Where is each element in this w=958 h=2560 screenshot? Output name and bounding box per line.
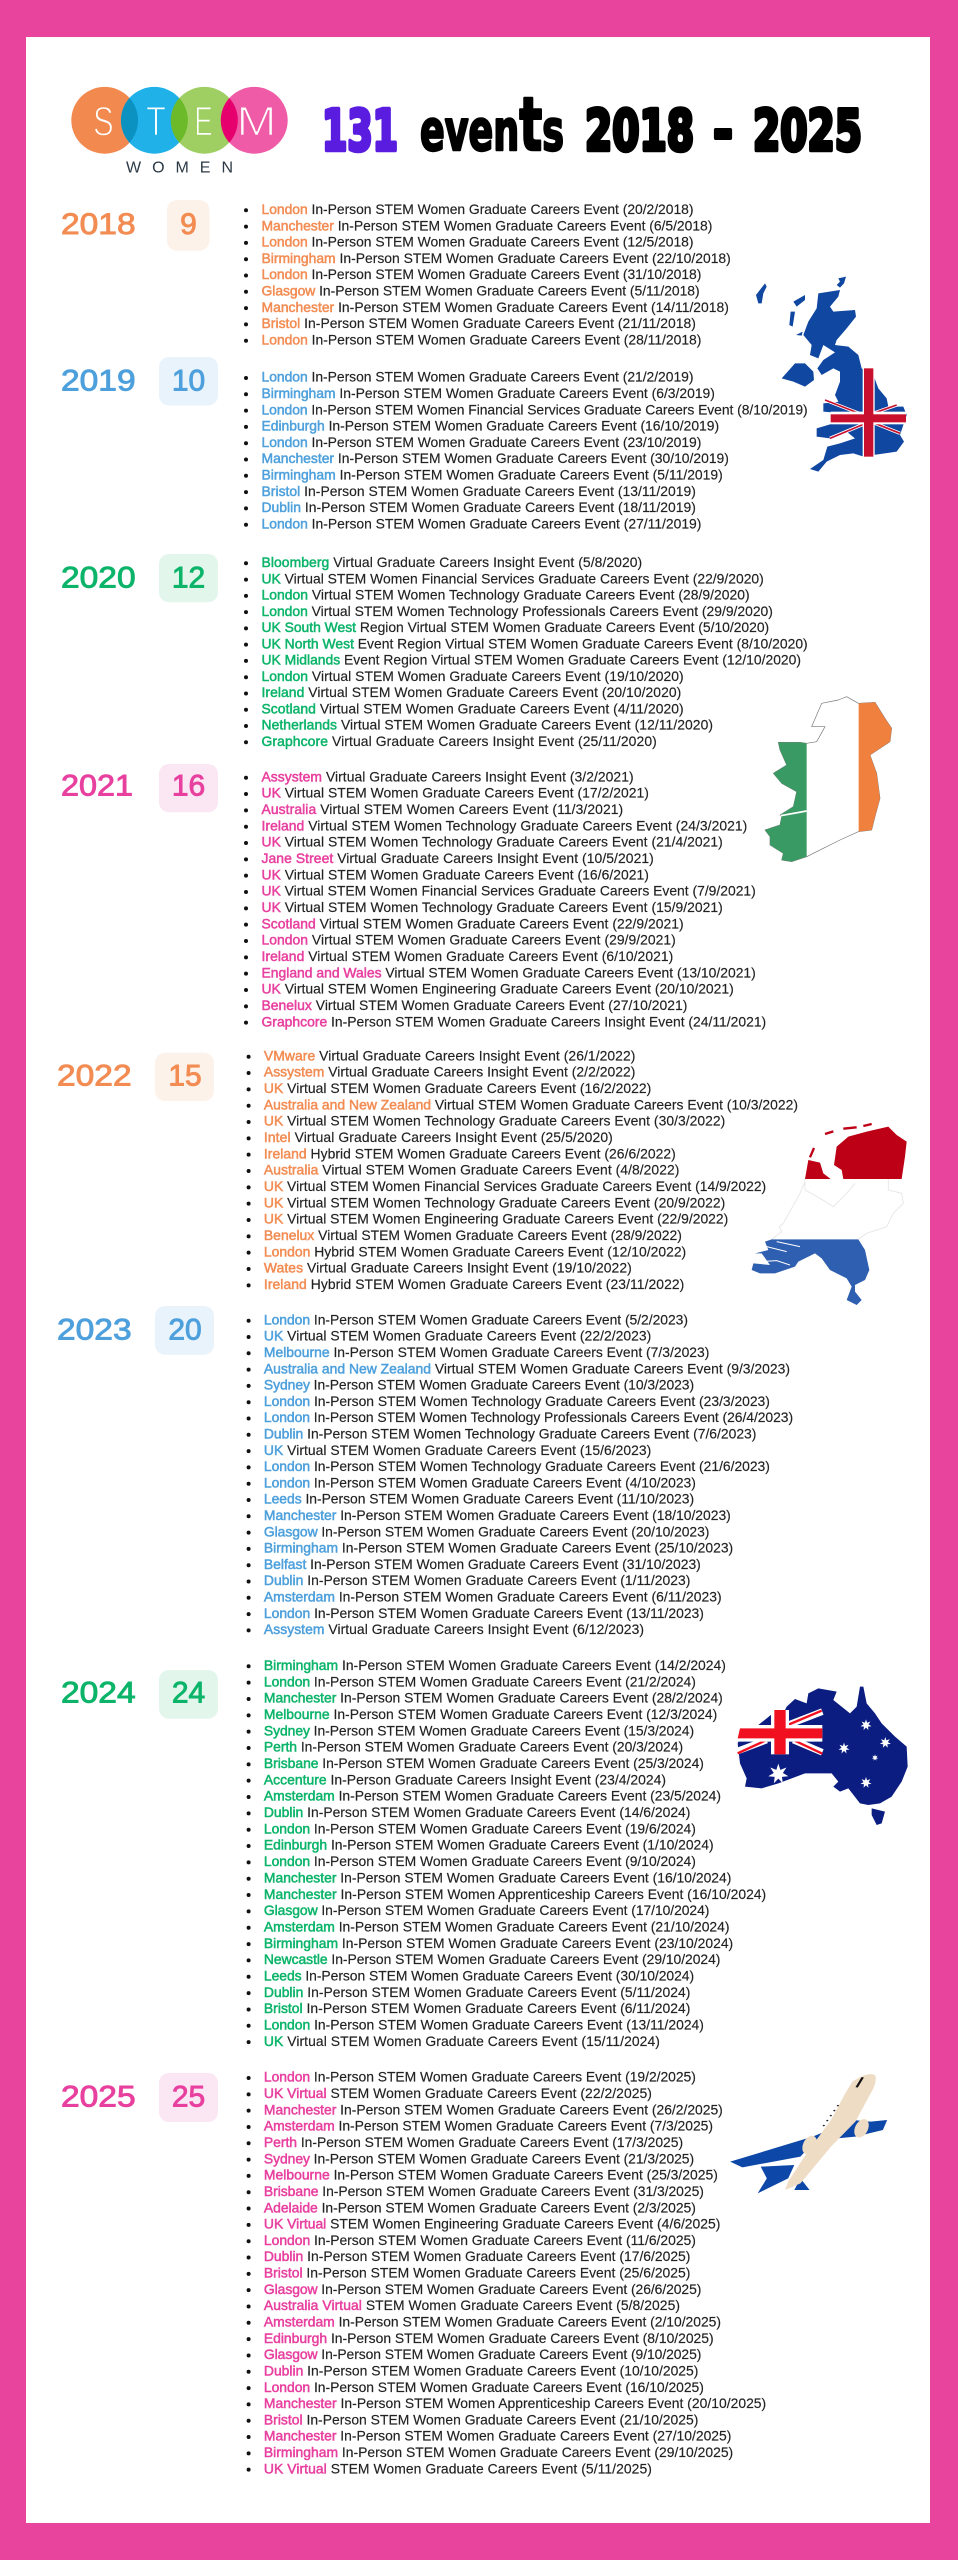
event list 2018: Manchester In-Person STEM Women Graduate Careers Event (6/5/2018) xyxy=(262,217,712,233)
map: Netherlands with flag xyxy=(752,1124,907,1305)
event list 2018: Manchester In-Person STEM Women Graduate Careers Event (14/11/2018) xyxy=(262,299,729,315)
event list 2020: UK North West Event Region Virtual STEM Women Graduate Careers Event (8/10/2020) xyxy=(262,635,808,651)
event list 2023: London In-Person STEM Women Technology Graduate Careers Event (21/6/2023) xyxy=(264,1458,770,1474)
event list 2024: Brisbane In-Person STEM Women Graduate Careers Event (25/3/2024) xyxy=(264,1755,704,1771)
event list 2022: Intel Virtual Graduate Careers Insight Event (25/5/2020) xyxy=(264,1129,613,1145)
event list 2024: London In-Person STEM Women Graduate Careers Event (9/10/2024) xyxy=(264,1853,696,1869)
event list 2022: Wates Virtual Graduate Careers Insight Event (19/10/2022) xyxy=(264,1260,632,1276)
event list 2024: Birmingham In-Person STEM Women Graduate Careers Event (23/10/2024) xyxy=(264,1935,733,1951)
event list 2023: London In-Person STEM Women Graduate Careers Event (4/10/2023) xyxy=(264,1474,696,1490)
event list 2025: London In-Person STEM Women Graduate Careers Event (11/6/2025) xyxy=(264,2232,696,2248)
event list 2020: London Virtual STEM Women Technology Professionals Careers Event (29/9/2020) xyxy=(262,603,773,619)
event list 2023: Leeds In-Person STEM Women Graduate Careers Event (11/10/2023) xyxy=(264,1491,694,1507)
event list 2024: UK Virtual STEM Women Graduate Careers Event (15/11/2024) xyxy=(264,2033,660,2049)
event list 2019: London In-Person STEM Women Graduate Careers Event (21/2/2019) xyxy=(262,369,694,385)
event list 2018: Glasgow In-Person STEM Women Graduate Careers Event (5/11/2018) xyxy=(262,282,700,298)
map: United Kingdom with flag xyxy=(756,277,907,472)
year label 2023: 2023 xyxy=(57,1314,132,1347)
event list 2019: London In-Person STEM Women Graduate Careers Event (23/10/2019) xyxy=(262,434,701,450)
event list 2021: Ireland Virtual STEM Women Technology Graduate Careers Event (24/3/2021) xyxy=(262,817,747,833)
event list 2024: London In-Person STEM Women Graduate Careers Event (13/11/2024) xyxy=(264,2016,704,2032)
year label 2025: 2025 xyxy=(61,2081,136,2114)
event list 2025: Glasgow In-Person STEM Women Graduate Careers Event (9/10/2025) xyxy=(264,2346,701,2362)
event list 2020: Ireland Virtual STEM Women Graduate Careers Event (20/10/2020) xyxy=(262,684,681,700)
event list 2025: Amsterdam In-Person STEM Women Graduate Careers Event (7/3/2025) xyxy=(264,2118,713,2134)
section: 2022 xyxy=(57,1047,798,1292)
event list 2025: Dublin In-Person STEM Women Graduate Careers Event (10/10/2025) xyxy=(264,2362,698,2378)
event list 2020: UK Virtual STEM Women Financial Services Graduate Careers Event (22/9/2020) xyxy=(262,570,764,586)
event list 2023 xyxy=(249,1311,793,1637)
event list 2025: Sydney In-Person STEM Women Graduate Careers Event (21/3/2025) xyxy=(264,2150,694,2166)
event list 2025 xyxy=(249,2069,766,2476)
logo: STEM Women: M xyxy=(236,98,277,145)
logo: STEM Women xyxy=(71,87,288,177)
event list 2024: Leeds In-Person STEM Women Graduate Careers Event (30/10/2024) xyxy=(264,1968,694,1984)
event list 2023: Manchester In-Person STEM Women Graduate Careers Event (18/10/2023) xyxy=(264,1507,731,1523)
event list 2023: Amsterdam In-Person STEM Women Graduate Careers Event (6/11/2023) xyxy=(264,1588,722,1604)
event list 2020: Scotland Virtual STEM Women Graduate Careers Event (4/11/2020) xyxy=(262,700,684,716)
event list 2022: Benelux Virtual STEM Women Graduate Careers Event (28/9/2022) xyxy=(264,1227,682,1243)
event list 2024: Manchester In-Person STEM Women Graduate Careers Event (16/10/2024) xyxy=(264,1869,731,1885)
event list 2024: Melbourne In-Person STEM Women Graduate Careers Event (12/3/2024) xyxy=(264,1706,717,1722)
badge: 24 events: 24 xyxy=(172,1677,205,1710)
year label 2024: 2024 xyxy=(61,1677,136,1710)
event list 2022: UK Virtual STEM Women Technology Graduate Careers Event (20/9/2022) xyxy=(264,1194,725,1210)
event list 2025: Adelaide In-Person STEM Women Graduate Careers Event (2/3/2025) xyxy=(264,2199,696,2215)
section: 2023 xyxy=(57,1306,793,1637)
event list 2025: UK Virtual STEM Women Graduate Careers Event (22/2/2025) xyxy=(264,2085,652,2101)
event list 2018: London In-Person STEM Women Graduate Careers Event (28/11/2018) xyxy=(262,331,701,347)
event list 2023: Melbourne In-Person STEM Women Graduate Careers Event (7/3/2023) xyxy=(264,1344,709,1360)
badge: 9 events xyxy=(167,200,210,251)
event list 2021: UK Virtual STEM Women Technology Graduate Careers Event (21/4/2021) xyxy=(262,834,723,850)
event list 2023: Belfast In-Person STEM Women Graduate Careers Event (31/10/2023) xyxy=(264,1556,701,1572)
logo: STEM Women: T xyxy=(146,98,166,145)
event list 2019: London In-Person STEM Women Graduate Careers Event (27/11/2019) xyxy=(262,515,701,531)
badge: 12 events: 12 xyxy=(172,561,205,594)
event list 2021: UK Virtual STEM Women Graduate Careers Event (17/2/2021) xyxy=(262,785,649,801)
year label 2019: 2019 xyxy=(61,365,136,398)
section: 2018 xyxy=(61,200,731,347)
event list 2021: England and Wales Virtual STEM Women Graduate Careers Event (13/10/2021) xyxy=(262,964,756,980)
event list 2025: Bristol In-Person STEM Women Graduate Careers Event (25/6/2025) xyxy=(264,2264,690,2280)
event list 2019: Birmingham In-Person STEM Women Graduate Careers Event (6/3/2019) xyxy=(262,385,715,401)
badge: 24 events xyxy=(159,1670,218,1719)
badge: 16 events xyxy=(159,764,218,812)
badge: 15 events: 15 xyxy=(168,1060,202,1093)
event list 2025: Amsterdam In-Person STEM Women Graduate Careers Event (2/10/2025) xyxy=(264,2314,721,2330)
event list 2019: Manchester In-Person STEM Women Graduate Careers Event (30/10/2019) xyxy=(262,450,729,466)
event list 2024: Newcastle In-Person STEM Women Graduate Careers Event (29/10/2024) xyxy=(264,1951,720,1967)
event list 2021: Benelux Virtual STEM Women Graduate Careers Event (27/10/2021) xyxy=(262,997,687,1013)
event list 2024: Manchester In-Person STEM Women Apprenticeship Careers Event (16/10/2024) xyxy=(264,1886,766,1902)
event list 2024: Dublin In-Person STEM Women Graduate Careers Event (14/6/2024) xyxy=(264,1804,690,1820)
event list 2022: UK Virtual STEM Women Graduate Careers Event (16/2/2022) xyxy=(264,1080,651,1096)
section: 2024 xyxy=(61,1657,766,2049)
logo: STEM Women: E xyxy=(194,98,213,145)
event list 2024: Amsterdam In-Person STEM Women Graduate Careers Event (21/10/2024) xyxy=(264,1918,730,1934)
title: - xyxy=(713,99,733,164)
event list 2023: London In-Person STEM Women Technology Professionals Careers Event (26/4/2023) xyxy=(264,1409,793,1425)
event list 2018: Birmingham In-Person STEM Women Graduate Careers Event (22/10/2018) xyxy=(262,250,731,266)
event list 2021: UK Virtual STEM Women Technology Graduate Careers Event (15/9/2021) xyxy=(262,899,723,915)
event list 2025: London In-Person STEM Women Graduate Careers Event (16/10/2025) xyxy=(264,2379,704,2395)
event list 2023: Glasgow In-Person STEM Women Graduate Careers Event (20/10/2023) xyxy=(264,1523,709,1539)
event list 2025: Edinburgh In-Person STEM Women Graduate Careers Event (8/10/2025) xyxy=(264,2330,714,2346)
event list 2023: UK Virtual STEM Women Graduate Careers Event (22/2/2023) xyxy=(264,1328,651,1344)
badge: 10 events: 10 xyxy=(172,365,205,398)
year label 2018: 2018 xyxy=(61,208,136,241)
event list 2021: UK Virtual STEM Women Engineering Graduate Careers Event (20/10/2021) xyxy=(262,981,734,997)
event list 2019 xyxy=(246,369,808,531)
event list 2025: Bristol In-Person STEM Women Graduate Careers Event (21/10/2025) xyxy=(264,2411,698,2427)
event list 2022: London Hybrid STEM Women Graduate Careers Event (12/10/2022) xyxy=(264,1243,686,1259)
title: 2025 xyxy=(753,99,862,164)
event list 2021: London Virtual STEM Women Graduate Careers Event (29/9/2021) xyxy=(262,932,676,948)
event list 2024: Edinburgh In-Person STEM Women Graduate Careers Event (1/10/2024) xyxy=(264,1837,714,1853)
event list 2024: Sydney In-Person STEM Women Graduate Careers Event (15/3/2024) xyxy=(264,1722,694,1738)
event list 2023: Assystem Virtual Graduate Careers Insight Event (6/12/2023) xyxy=(264,1621,644,1637)
logo: STEM Women: S xyxy=(93,98,114,145)
event list 2018 xyxy=(246,201,731,347)
event list 2025: UK Virtual STEM Women Graduate Careers Event (5/11/2025) xyxy=(264,2460,652,2476)
event list 2025: Perth In-Person STEM Women Graduate Careers Event (17/3/2025) xyxy=(264,2134,683,2150)
event list 2025: Birmingham In-Person STEM Women Graduate Careers Event (29/10/2025) xyxy=(264,2444,733,2460)
event list 2019: Bristol In-Person STEM Women Graduate Careers Event (13/11/2019) xyxy=(262,483,696,499)
event list 2021: Assystem Virtual Graduate Careers Insight Event (3/2/2021) xyxy=(262,768,634,784)
event list 2023: Sydney In-Person STEM Women Graduate Careers Event (10/3/2023) xyxy=(264,1377,694,1393)
event list 2025: Manchester In-Person STEM Women Graduate Careers Event (27/10/2025) xyxy=(264,2428,731,2444)
event list 2021: Scotland Virtual STEM Women Graduate Careers Event (22/9/2021) xyxy=(262,915,684,931)
badge: 25 events xyxy=(159,2073,218,2122)
event list 2019: London In-Person STEM Women Financial Services Graduate Careers Event (8/10/2019) xyxy=(262,401,808,417)
event list 2020: Bloomberg Virtual Graduate Careers Insight Event (5/8/2020) xyxy=(262,554,642,570)
event list 2022: UK Virtual STEM Women Financial Services Graduate Careers Event (14/9/2022) xyxy=(264,1178,766,1194)
title: events xyxy=(420,82,564,168)
badge: 10 events xyxy=(159,357,218,406)
event list 2023: London In-Person STEM Women Graduate Careers Event (5/2/2023) xyxy=(264,1311,688,1327)
event list 2019: Dublin In-Person STEM Women Graduate Careers Event (18/11/2019) xyxy=(262,499,696,515)
event list 2023: Birmingham In-Person STEM Women Graduate Careers Event (25/10/2023) xyxy=(264,1540,733,1556)
event list 2024: Birmingham In-Person STEM Women Graduate Careers Event (14/2/2024) xyxy=(264,1657,726,1673)
event list 2025: Australia Virtual STEM Women Graduate Careers Event (5/8/2025) xyxy=(264,2297,680,2313)
event list 2023: London In-Person STEM Women Technology Graduate Careers Event (23/3/2023) xyxy=(264,1393,770,1409)
event list 2021: Australia Virtual STEM Women Careers Event (11/3/2021) xyxy=(262,801,623,817)
event list 2022: Australia and New Zealand Virtual STEM Women Graduate Careers Event (10/3/2022) xyxy=(264,1096,798,1112)
event list 2024: Dublin In-Person STEM Women Graduate Careers Event (5/11/2024) xyxy=(264,1984,690,2000)
event list 2024: Bristol In-Person STEM Women Graduate Careers Event (6/11/2024) xyxy=(264,2000,690,2016)
event list 2023: Australia and New Zealand Virtual STEM Women Graduate Careers Event (9/3/2023) xyxy=(264,1360,790,1376)
icon: aeroplane xyxy=(730,2074,887,2193)
event list 2020: Netherlands Virtual STEM Women Graduate Careers Event (12/11/2020) xyxy=(262,717,713,733)
event list 2025: Melbourne In-Person STEM Women Graduate Careers Event (25/3/2025) xyxy=(264,2167,718,2183)
event list 2022: Australia Virtual STEM Women Graduate Careers Event (4/8/2022) xyxy=(264,1162,679,1178)
event list 2018: London In-Person STEM Women Graduate Careers Event (20/2/2018) xyxy=(262,201,694,217)
logo: STEM Women: WOMEN xyxy=(126,160,233,177)
year label 2022: 2022 xyxy=(57,1060,132,1093)
event list 2023: Dublin In-Person STEM Women Graduate Careers Event (1/11/2023) xyxy=(264,1572,690,1588)
badge: 20 events xyxy=(155,1306,214,1355)
event list 2022: UK Virtual STEM Women Technology Graduate Careers Event (30/3/2022) xyxy=(264,1113,725,1129)
title xyxy=(322,82,862,168)
event list 2024: Manchester In-Person STEM Women Graduate Careers Event (28/2/2024) xyxy=(264,1690,723,1706)
event list 2020 xyxy=(246,554,808,749)
event list 2025: Dublin In-Person STEM Women Graduate Careers Event (17/6/2025) xyxy=(264,2248,690,2264)
badge: 16 events: 16 xyxy=(172,770,205,803)
section: 2025 xyxy=(61,2069,766,2476)
section: 2020 xyxy=(61,554,808,749)
section: 2019 xyxy=(61,357,808,531)
event list 2024: London In-Person STEM Women Graduate Careers Event (19/6/2024) xyxy=(264,1820,696,1836)
badge: 25 events: 25 xyxy=(172,2081,205,2114)
event list 2020: UK Midlands Event Region Virtual STEM Women Graduate Careers Event (12/10/2020) xyxy=(262,652,801,668)
event list 2021: UK Virtual STEM Women Financial Services Graduate Careers Event (7/9/2021) xyxy=(262,883,756,899)
event list 2023: UK Virtual STEM Women Graduate Careers Event (15/6/2023) xyxy=(264,1442,651,1458)
event list 2022: UK Virtual STEM Women Engineering Graduate Careers Event (22/9/2022) xyxy=(264,1211,728,1227)
event list 2021: UK Virtual STEM Women Graduate Careers Event (16/6/2021) xyxy=(262,866,649,882)
event list 2024: Amsterdam In-Person STEM Women Graduate Careers Event (23/5/2024) xyxy=(264,1788,721,1804)
event list 2023: London In-Person STEM Women Graduate Careers Event (13/11/2023) xyxy=(264,1605,704,1621)
badge: 15 events xyxy=(155,1053,214,1101)
event list 2018: London In-Person STEM Women Graduate Careers Event (31/10/2018) xyxy=(262,266,701,282)
event list 2025: UK Virtual STEM Women Engineering Graduate Careers Event (4/6/2025) xyxy=(264,2216,720,2232)
map: Ireland with flag xyxy=(765,697,892,862)
event list 2020: London Virtual STEM Women Technology Graduate Careers Event (28/9/2020) xyxy=(262,586,750,602)
badge: 20 events: 20 xyxy=(168,1314,202,1347)
event list 2020: UK South West Region Virtual STEM Women Graduate Careers Event (5/10/2020) xyxy=(262,619,769,635)
event list 2024: London In-Person STEM Women Graduate Careers Event (21/2/2024) xyxy=(264,1673,696,1689)
year label 2021: 2021 xyxy=(61,770,133,803)
title: 131 xyxy=(322,99,398,164)
title: 2018 xyxy=(585,99,694,164)
event list 2022 xyxy=(249,1047,798,1292)
event list 2025: London In-Person STEM Women Graduate Careers Event (19/2/2025) xyxy=(264,2069,696,2085)
event list 2021: Graphcore In-Person STEM Women Graduate Careers Insight Event (24/11/2021) xyxy=(262,1013,766,1029)
event list 2024: Accenture In-Person Graduate Careers Insight Event (23/4/2024) xyxy=(264,1771,666,1787)
badge: 12 events xyxy=(159,554,218,602)
event list 2020: Graphcore Virtual Graduate Careers Insight Event (25/11/2020) xyxy=(262,733,657,749)
year label 2020: 2020 xyxy=(61,561,136,594)
event list 2025: Brisbane In-Person STEM Women Graduate Careers Event (31/3/2025) xyxy=(264,2183,704,2199)
event list 2025: Glasgow In-Person STEM Women Graduate Careers Event (26/6/2025) xyxy=(264,2281,701,2297)
event list 2018: London In-Person STEM Women Graduate Careers Event (12/5/2018) xyxy=(262,234,694,250)
event list 2022: Ireland Hybrid STEM Women Graduate Careers Event (26/6/2022) xyxy=(264,1145,676,1161)
event list 2021 xyxy=(246,768,766,1029)
event list 2021: Jane Street Virtual Graduate Careers Insight Event (10/5/2021) xyxy=(262,850,654,866)
event list 2024 xyxy=(249,1657,766,2049)
event list 2022: Assystem Virtual Graduate Careers Insight Event (2/2/2022) xyxy=(264,1064,635,1080)
badge: 9 events: 9 xyxy=(180,208,197,241)
event list 2021: Ireland Virtual STEM Women Graduate Careers Event (6/10/2021) xyxy=(262,948,673,964)
event list 2019: Birmingham In-Person STEM Women Graduate Careers Event (5/11/2019) xyxy=(262,466,723,482)
map: Australia with flag xyxy=(738,1687,908,1825)
event list 2019: Edinburgh In-Person STEM Women Graduate Careers Event (16/10/2019) xyxy=(262,418,719,434)
event list 2023: Dublin In-Person STEM Women Technology Graduate Careers Event (7/6/2023) xyxy=(264,1426,756,1442)
event list 2025: Manchester In-Person STEM Women Graduate Careers Event (26/2/2025) xyxy=(264,2101,723,2117)
section: 2021 xyxy=(61,764,766,1029)
event list 2024: Perth In-Person STEM Women Graduate Careers Event (20/3/2024) xyxy=(264,1739,683,1755)
event list 2024: Glasgow In-Person STEM Women Graduate Careers Event (17/10/2024) xyxy=(264,1902,709,1918)
event list 2018: Bristol In-Person STEM Women Graduate Careers Event (21/11/2018) xyxy=(262,315,696,331)
event list 2020: London Virtual STEM Women Graduate Careers Event (19/10/2020) xyxy=(262,668,684,684)
event list 2022: Ireland Hybrid STEM Women Graduate Careers Event (23/11/2022) xyxy=(264,1276,684,1292)
event list 2025: Manchester In-Person STEM Women Apprenticeship Careers Event (20/10/2025) xyxy=(264,2395,766,2411)
event list 2022: VMware Virtual Graduate Careers Insight Event (26/1/2022) xyxy=(264,1047,635,1063)
